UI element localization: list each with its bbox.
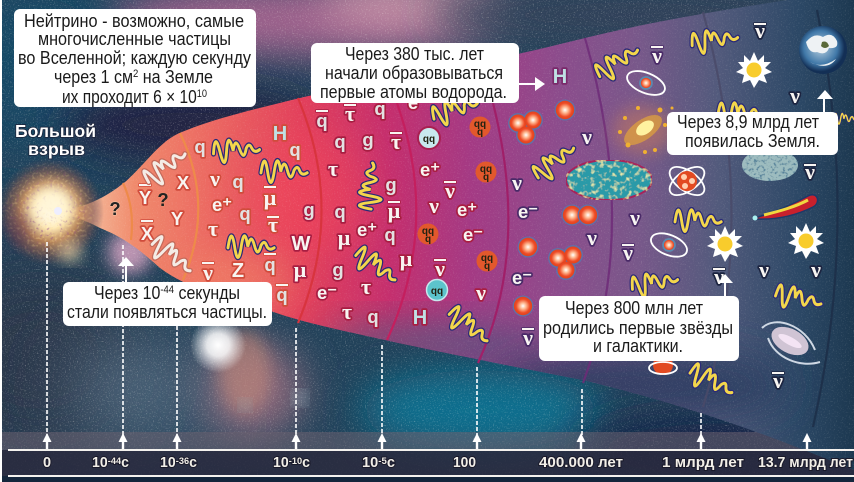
particles: late epochs: ν — [581, 124, 592, 149]
epoch arcs — [123, 10, 838, 427]
particles: first epochs: τ — [268, 212, 278, 237]
timeline labels: -10 — [289, 456, 302, 467]
callout: neutrino: 2 — [133, 68, 138, 80]
first galaxy: yellow cluster — [613, 106, 674, 154]
particles: late epochs: ν — [522, 325, 533, 350]
callout: neutrino: 10 — [197, 88, 207, 100]
timeline labels: 400.000 лет — [539, 455, 623, 471]
callout: neutrino — [14, 9, 256, 107]
callout: earth — [667, 90, 838, 155]
particles: first epochs: ν — [209, 166, 220, 191]
timeline labels: 10 — [160, 455, 176, 471]
timeline labels: с — [189, 455, 197, 471]
atoms — [624, 66, 709, 375]
particles: first epochs: Z — [232, 260, 244, 282]
callout: hydrogen atoms: первые атомы водорода. — [320, 81, 507, 102]
particles: far epochs: ν — [713, 264, 724, 289]
particles: first epochs: q — [276, 284, 288, 305]
callout: neutrino: во Вселенной; каждую секунду — [18, 47, 252, 68]
heading: big bang: взрыв — [28, 139, 85, 159]
particles: first epochs: H — [273, 123, 287, 145]
particles: middle epochs: q — [316, 110, 328, 131]
callout: neutrino: через 1 см — [54, 66, 145, 87]
particles: first epochs — [109, 123, 301, 305]
particles: late epochs: ν — [651, 43, 662, 68]
particles: middle epochs: ν — [475, 280, 486, 305]
particles: middle epochs: g — [303, 199, 315, 220]
particles: middle epochs: e⁺ — [420, 159, 440, 180]
particles: first epochs: q — [194, 136, 206, 157]
particles: middle epochs: W — [292, 233, 311, 255]
particles: middle epochs: e⁺ — [457, 199, 477, 220]
callout: neutrino: Нейтрино - возможно, самые — [24, 10, 244, 31]
timeline labels: 1 млрд лет — [662, 455, 744, 471]
particles: middle epochs: e⁻ — [463, 224, 483, 245]
callout: first stars — [539, 274, 739, 361]
particles: middle epochs: μ — [400, 246, 413, 271]
hadrons: quark triplets: qq — [474, 119, 486, 130]
timeline labels: 10 — [273, 455, 289, 471]
particles: first epochs: e⁺ — [212, 194, 232, 215]
nebula — [742, 149, 798, 181]
particles: first epochs: q — [232, 171, 244, 192]
particles: first epochs: X — [177, 172, 190, 193]
galaxy glow — [190, 317, 305, 414]
heading: big bang — [15, 121, 96, 159]
dashed timeline drop lines — [47, 242, 701, 435]
hadrons: quark triplets: q — [477, 127, 483, 138]
hadrons: quark triplets: qq — [481, 253, 493, 264]
spiral galaxy — [762, 321, 820, 364]
particles: first epochs: ? — [109, 198, 121, 219]
particles: middle epochs: μ — [338, 225, 351, 250]
particles: middle epochs: ν — [434, 256, 445, 281]
callout: neutrino: многочисленные частицы — [38, 28, 231, 49]
timeline band — [0, 432, 854, 482]
hadrons: quark triplets: qq — [431, 286, 443, 297]
timeline labels: 10 — [92, 455, 108, 471]
particles: middle epochs: H — [413, 307, 427, 329]
callout: neutrino: их проходит 6 × 10 — [62, 86, 223, 107]
hadrons: quark triplets: q — [483, 172, 489, 183]
particles: middle epochs: ν — [444, 178, 455, 203]
particles: first epochs: q — [264, 254, 276, 275]
timeline labels: с — [387, 455, 395, 471]
callout: earth: Через 8,9 млрд лет — [677, 111, 819, 132]
particles: late epochs: H — [553, 66, 567, 88]
particles: middle epochs: q — [374, 98, 386, 119]
hadrons: quark triplets: qq — [422, 226, 434, 237]
particles: first epochs: q — [289, 139, 301, 160]
particles: late epochs: ν — [629, 205, 640, 230]
particles: middle epochs: τ — [342, 299, 352, 324]
callout: hydrogen atoms — [311, 43, 545, 103]
particles: middle epochs: q — [367, 306, 379, 327]
comet — [752, 195, 818, 220]
timeline labels — [43, 455, 853, 471]
particles: middle epochs: τ — [391, 129, 401, 154]
callout: hydrogen atoms: Через 380 тыс. лет — [345, 43, 484, 64]
hadrons: quark triplets: q — [425, 234, 431, 245]
particles: middle epochs: e⁺ — [357, 219, 377, 240]
particles: middle epochs: ν — [428, 193, 439, 218]
particles: middle epochs: q — [334, 201, 346, 222]
particles: middle epochs: e⁻ — [317, 282, 337, 303]
particles: middle epochs — [292, 92, 486, 329]
particles: first epochs: μ — [264, 185, 277, 210]
callout: first stars: и галактики. — [593, 335, 683, 356]
hadrons: quark triplets: q — [484, 261, 490, 272]
callout: first particles: секунды — [174, 282, 240, 303]
particles: first epochs: ν — [202, 260, 213, 285]
particles: first epochs: Y — [171, 208, 184, 229]
protons and nuclei — [508, 100, 598, 316]
timeline labels: -44 — [108, 456, 122, 467]
stars — [707, 52, 824, 262]
callout: first particles: стали появляться частицы. — [67, 301, 267, 322]
particles: far epochs: ν — [810, 257, 821, 282]
callout: first particles: Через 10 — [94, 282, 171, 303]
callout: first particles: -44 — [160, 284, 174, 296]
wave quanta — [141, 26, 854, 401]
particles: late epochs: ν — [511, 170, 522, 195]
callout: first stars: родились первые звёзды — [543, 317, 733, 338]
timeline arrows — [42, 433, 812, 450]
particles: middle epochs: q — [384, 224, 396, 245]
timeline labels: 13.7 млрд лет — [758, 455, 853, 471]
particles: far epochs — [713, 18, 821, 393]
heading: big bang: Большой — [15, 121, 96, 141]
particles: late epochs: ν — [622, 240, 633, 265]
particles: middle epochs: g — [332, 259, 344, 280]
particles: middle epochs: τ — [328, 156, 338, 181]
callout: first particles — [63, 257, 272, 326]
particles: late epochs: ν — [586, 225, 597, 250]
particles: middle epochs: μ — [294, 257, 307, 282]
earth — [799, 26, 847, 74]
timeline labels: с — [302, 455, 310, 471]
callout: hydrogen atoms: начали образовываться — [325, 62, 503, 83]
callout: earth: появилась Земля. — [685, 130, 820, 151]
particles: late epochs: e⁻ — [518, 201, 538, 222]
particles: late epochs: e⁻ — [512, 267, 532, 288]
cosmic microwave background map — [566, 160, 652, 200]
timeline labels: -5 — [378, 456, 388, 467]
particles: far epochs: ν — [758, 257, 769, 282]
particles: first epochs: q — [239, 203, 251, 224]
particles: first epochs: ? — [157, 189, 169, 210]
particles: late epochs — [511, 43, 663, 350]
hadrons: quark triplets: qq — [423, 134, 435, 145]
timeline labels: 0 — [43, 455, 51, 471]
particles: middle epochs: μ — [388, 198, 401, 223]
particles: middle epochs: e — [408, 92, 418, 113]
particles: far epochs: ν — [772, 368, 783, 393]
hadrons: quark triplets — [418, 116, 498, 300]
particles: far epochs: ν — [754, 18, 765, 43]
hadrons: quark triplets: qq — [480, 164, 492, 175]
particles: far epochs: ν — [789, 83, 800, 108]
timeline labels: 100 — [453, 455, 476, 471]
timeline labels: 10 — [362, 455, 378, 471]
big bang explosion — [0, 158, 104, 266]
particles: middle epochs: τ — [345, 101, 355, 126]
particles: far epochs: ν — [804, 159, 815, 184]
timeline labels: -36 — [176, 456, 189, 467]
timeline labels: с — [121, 455, 129, 471]
particles: middle epochs: g — [362, 129, 374, 150]
particles: middle epochs: g — [385, 174, 397, 195]
particles: first epochs: Y — [139, 187, 152, 208]
timeline axis — [8, 449, 854, 477]
particles: middle epochs: q — [334, 131, 346, 152]
particles: middle epochs: τ — [361, 274, 371, 299]
particles: first epochs: τ — [208, 216, 218, 241]
callout: first stars: Через 800 млн лет — [565, 297, 703, 318]
callout: neutrino: на Земле — [138, 66, 213, 87]
particles: first epochs: X — [141, 223, 154, 244]
